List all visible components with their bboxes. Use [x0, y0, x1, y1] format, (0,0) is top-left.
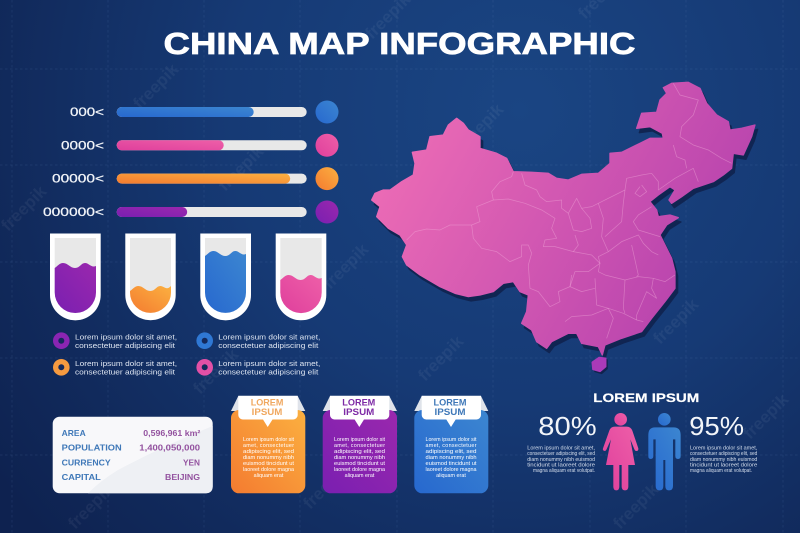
- panel: blue card: Lorem ipsum dolor sit: [426, 437, 477, 443]
- panel: blue card: laoreet dolore magna: [426, 467, 476, 473]
- legend item: orange: Lorem ipsum dolor sit amet,: [75, 359, 177, 368]
- panel: orange card: Lorem ipsum dolor sit: [243, 437, 294, 443]
- panel: purple card: diam nonummy nibh: [334, 455, 385, 461]
- panel: orange card: amet, consectetuer: [243, 443, 294, 449]
- panel: purple card: euismod tincidunt ut: [334, 461, 386, 467]
- panel: country facts: AREA: [62, 429, 86, 438]
- text: freepik: [129, 60, 183, 113]
- panel: purple card: LOREM: [342, 398, 375, 409]
- panel: gender statistics: [527, 391, 757, 490]
- stat: 80%: tincidunt ut laoreet dolore: [527, 462, 595, 468]
- bar row: blue: 000<: [70, 107, 104, 119]
- panel: blue card: LOREM: [434, 398, 467, 409]
- panel: blue card: euismod tincidunt ut: [426, 461, 477, 467]
- text: freepik: [214, 142, 268, 195]
- tube: pink: [276, 234, 326, 320]
- stat: 80%: diam nonummy nibh euismod: [527, 457, 595, 463]
- map shadow: [374, 87, 758, 359]
- panel: purple card: [323, 396, 397, 493]
- bar row: orange: 00000<: [52, 174, 104, 186]
- text: freepik: [319, 240, 373, 293]
- stat: 95%: magna aliquam erat volutpat.: [690, 468, 752, 474]
- stat: 80%: consectetuer adipiscing elit, sed: [527, 451, 595, 457]
- panel: country facts: POPULATION: [62, 444, 122, 453]
- text: freepik: [64, 480, 118, 533]
- tube: orange: [125, 234, 176, 320]
- legend item: orange: [53, 359, 177, 376]
- panel: blue card: amet, consectetuer: [426, 443, 477, 449]
- bar row: purple: [43, 200, 338, 224]
- legend item: blue: Lorem ipsum dolor sit amet,: [218, 332, 320, 342]
- map of China: [372, 82, 758, 373]
- stat: 95%: Lorem ipsum dolor sit amet,: [690, 446, 757, 452]
- province borders: [407, 83, 732, 338]
- stat: 80%: [527, 413, 597, 474]
- legend item: purple: [53, 332, 177, 350]
- stat: 95%: consectetuer adipiscing elit, sed: [690, 451, 757, 457]
- bar row: blue: [70, 100, 338, 124]
- panel: purple card: laoreet dolore magna: [334, 467, 385, 473]
- legend item: pink: Lorem ipsum dolor sit amet,: [218, 359, 320, 368]
- panel: blue card: [414, 396, 488, 493]
- panel: country facts: BEIJING: [165, 473, 200, 482]
- text: freepik: [649, 295, 703, 348]
- panel: orange card: diam nonummy nibh: [243, 455, 294, 461]
- panel: blue card: diam nonummy nibh: [426, 455, 476, 461]
- panel: purple card: Lorem ipsum dolor sit: [334, 437, 385, 443]
- icon: man: [648, 413, 681, 490]
- text: freepik: [454, 100, 508, 153]
- legend item: orange: consectetuer adipiscing elit: [75, 368, 176, 376]
- icon: woman: [603, 413, 638, 490]
- stat: 80%: 80%: [538, 413, 597, 441]
- panel: orange card: laoreet dolore magna: [243, 467, 294, 473]
- legend item: blue: [196, 332, 320, 350]
- Hainan island: [592, 358, 607, 373]
- title: CHINA MAP INFOGRAPHIC: [164, 26, 636, 61]
- stat: 95%: [689, 413, 757, 474]
- panel: purple card: adipiscing elit, sed: [334, 449, 385, 455]
- stat: 95%: 95%: [689, 413, 744, 441]
- legend item: blue: consectetuer adipiscing elit: [218, 341, 319, 350]
- panel: orange card: adipiscing elit, sed: [243, 449, 294, 455]
- text: freepik: [609, 480, 663, 533]
- stat: 95%: tincidunt ut laoreet dolore: [690, 462, 757, 468]
- text: freepik: [189, 345, 243, 398]
- panel: country facts: CAPITAL: [62, 473, 101, 482]
- panel: blue card: aliquam erat: [436, 473, 466, 479]
- legend: [53, 332, 320, 376]
- panel: orange card: euismod tincidunt ut: [243, 461, 295, 467]
- stat: 95%: diam nonummy nibh euismod: [690, 457, 757, 463]
- panel: purple card: IPSUM: [343, 407, 374, 418]
- text: freepik: [299, 460, 353, 513]
- bar row: purple: 000000<: [43, 207, 104, 219]
- panel: country facts: 1,400,050,000: [139, 444, 201, 453]
- bar row: pink: [61, 134, 338, 157]
- panel: purple card: amet, consectetuer: [334, 443, 385, 449]
- tube: blue: [200, 234, 251, 320]
- panel: country facts: 0,596,961 km²: [143, 429, 201, 438]
- bar row: pink: 0000<: [61, 140, 104, 152]
- panel: blue card: adipiscing elit, sed: [426, 449, 476, 455]
- test tubes: [50, 234, 326, 320]
- panel: orange card: LOREM: [251, 398, 283, 409]
- text: freepik: [414, 332, 468, 385]
- legend item: pink: consectetuer adipiscing elit: [218, 368, 319, 376]
- stat: 80%: magna aliquam erat volutpat.: [533, 468, 595, 474]
- mainland: [372, 82, 755, 355]
- panel: orange card: IPSUM: [252, 407, 282, 418]
- heading: LOREM IPSUM: [593, 391, 699, 405]
- stat: 80%: Lorem ipsum dolor sit amet,: [527, 446, 595, 452]
- panel: purple card: aliquam erat: [345, 473, 375, 479]
- legend item: pink: [196, 359, 320, 376]
- panel: country facts: [53, 417, 213, 493]
- tube: purple: [50, 234, 101, 320]
- panel: country facts: YEN: [183, 458, 200, 467]
- panel: orange card: [231, 396, 305, 493]
- panel: blue card: IPSUM: [434, 407, 466, 418]
- bar row: orange: [52, 167, 338, 190]
- legend item: purple: Lorem ipsum dolor sit amet,: [75, 332, 177, 342]
- text: freepik: [739, 390, 793, 443]
- panel: country facts: CURRENCY: [62, 458, 111, 467]
- progress bars: [43, 100, 338, 224]
- legend item: purple: consectetuer adipiscing elit: [75, 341, 176, 350]
- panel: orange card: aliquam erat: [254, 473, 284, 479]
